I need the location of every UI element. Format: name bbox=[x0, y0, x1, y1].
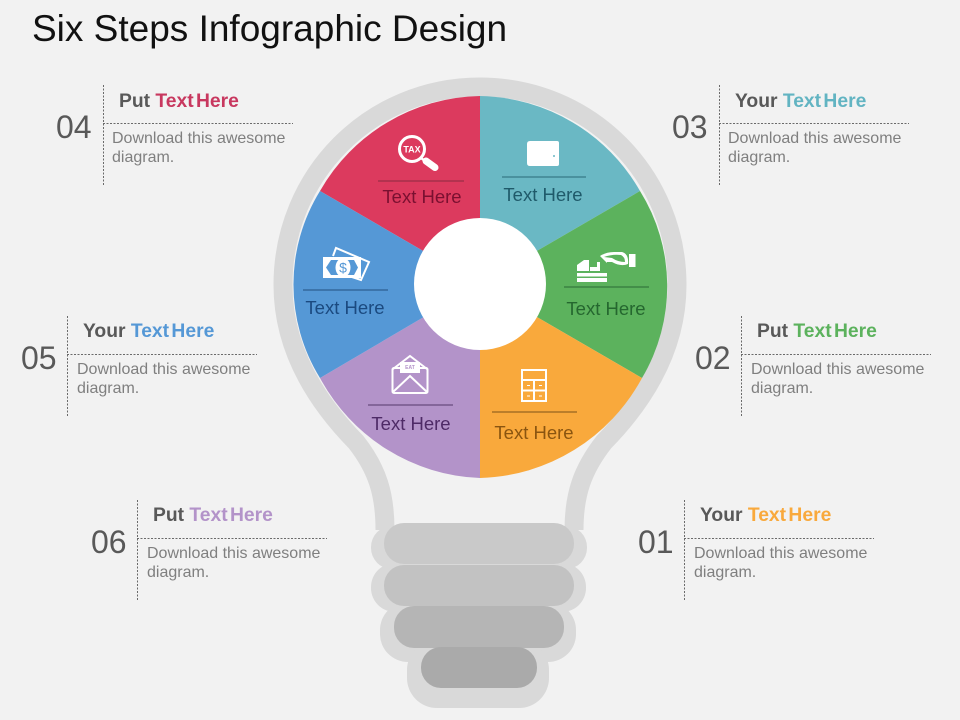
step 05 text block: diagram. bbox=[77, 380, 139, 397]
wedge: step 06 purple bbox=[320, 284, 480, 478]
step 03 text block: diagram. bbox=[728, 149, 790, 166]
wedge: step 02 green bbox=[480, 191, 667, 378]
step 05 text block: Download this awesome bbox=[77, 361, 251, 378]
step 02 text block bbox=[695, 316, 931, 417]
label: green wedge: Text Here bbox=[566, 298, 646, 319]
step 04 text block: Download this awesome bbox=[112, 130, 286, 147]
icon: calculator bbox=[522, 370, 546, 401]
bulb outline bbox=[283, 87, 677, 530]
step 05 text block: Your Text Here bbox=[83, 321, 215, 342]
label: blue wedge bbox=[303, 290, 388, 318]
step 02 text block: diagram. bbox=[751, 380, 813, 397]
base segment 3 bbox=[394, 606, 564, 648]
step 03 text block: Download this awesome bbox=[728, 130, 902, 147]
step 04 text block: diagram. bbox=[112, 149, 174, 166]
icon: tax magnifier bbox=[400, 136, 435, 168]
step 01 text block: diagram. bbox=[694, 564, 756, 581]
label: purple wedge: Text Here bbox=[371, 413, 451, 434]
wedge: step 01 orange bbox=[480, 284, 642, 478]
step 01 text block: Download this awesome bbox=[694, 545, 868, 562]
center circle bbox=[414, 218, 546, 350]
label: teal wedge: Text Here bbox=[503, 184, 583, 205]
icon: tax magnifier: TAX bbox=[403, 144, 421, 154]
icon: hand and money bbox=[577, 252, 636, 282]
step 04 text block bbox=[56, 85, 293, 186]
icon: open envelope: EAT bbox=[405, 365, 415, 371]
label: orange wedge bbox=[492, 412, 577, 443]
wedge: step 04 red bbox=[320, 96, 480, 284]
step 03 text block: 03 bbox=[672, 109, 708, 145]
label: blue wedge: Text Here bbox=[305, 297, 385, 318]
base segment 4 bbox=[421, 647, 537, 688]
step 06 text block: diagram. bbox=[147, 564, 209, 581]
step 02 text block: Download this awesome bbox=[751, 361, 925, 378]
bulb base outline bbox=[371, 526, 587, 708]
step 06 text block: Download this awesome bbox=[147, 545, 321, 562]
icon: banknotes: $ bbox=[339, 260, 347, 276]
icon: open envelope bbox=[392, 356, 428, 393]
step 01 text block: 01 bbox=[638, 524, 674, 560]
step 03 text block bbox=[672, 85, 909, 186]
wedge: step 05 blue bbox=[293, 191, 480, 378]
wedge: step 03 teal bbox=[480, 96, 640, 284]
step 05 text block: 05 bbox=[21, 340, 57, 376]
label: orange wedge: Text Here bbox=[494, 422, 574, 443]
step 06 text block: 06 bbox=[91, 524, 127, 560]
label: purple wedge bbox=[368, 405, 453, 434]
step 01 text block bbox=[638, 500, 874, 601]
step 03 text block: Your Text Here bbox=[735, 91, 867, 112]
base segment 1 bbox=[384, 523, 574, 564]
title: Six Steps Infographic Design bbox=[32, 8, 507, 49]
icon: banknotes bbox=[323, 248, 369, 280]
base segment 2 bbox=[384, 565, 574, 606]
label: green wedge bbox=[564, 287, 649, 319]
step 04 text block: 04 bbox=[56, 109, 92, 145]
step 02 text block: 02 bbox=[695, 340, 731, 376]
step 06 text block bbox=[91, 500, 327, 601]
step 02 text block: Put Text Here bbox=[757, 321, 877, 342]
step 04 text block: Put Text Here bbox=[119, 91, 239, 112]
icon: wallet bbox=[527, 141, 559, 166]
light bulb bbox=[283, 87, 677, 708]
step 06 text block: Put Text Here bbox=[153, 505, 273, 526]
label: red wedge: Text Here bbox=[382, 186, 462, 207]
step 05 text block bbox=[21, 316, 257, 417]
step 01 text block: Your Text Here bbox=[700, 505, 832, 526]
